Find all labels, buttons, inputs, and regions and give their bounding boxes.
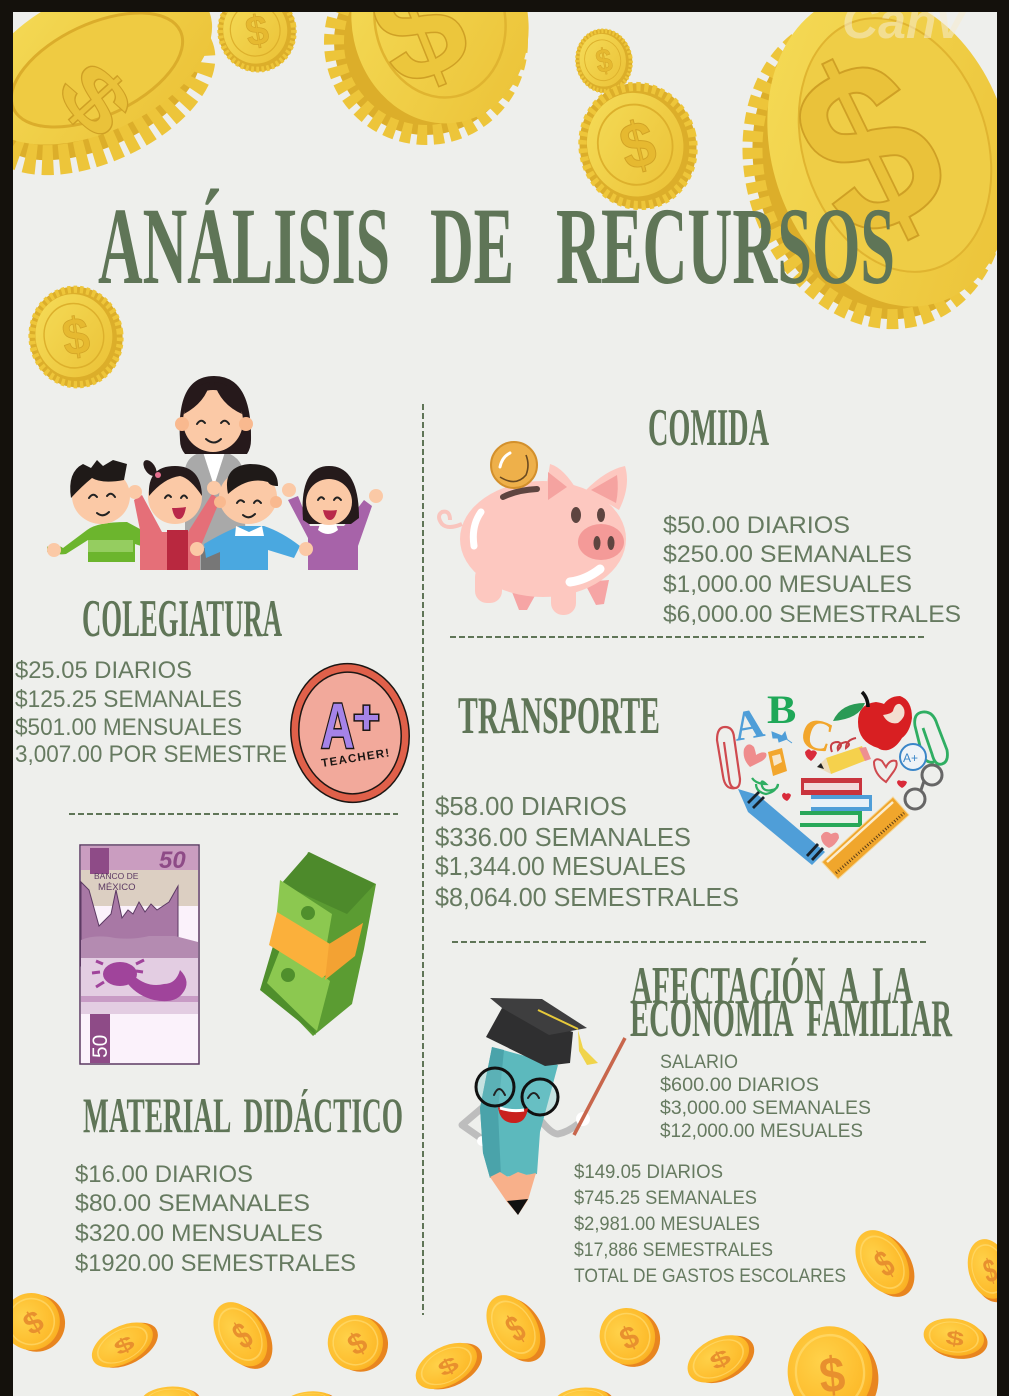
coin: medium (578, 82, 698, 210)
illustration: pencil teacher (462, 998, 625, 1215)
illustration: 50 peso banknote: BANCO DE (94, 871, 139, 881)
pencil tip (490, 1172, 536, 1215)
coin 4: $ (342, 1326, 373, 1363)
text: comida amounts: $50.00 DIARIOS (663, 512, 850, 539)
letters A B C: B (767, 689, 796, 733)
coin 4 (328, 1315, 388, 1372)
icon: piggy bank (439, 442, 627, 615)
heading: material didactico: MATERIAL DIDÁCTICO (83, 1087, 403, 1143)
text: total de gastos escolares: $745.25 SEMANALES (574, 1188, 757, 1209)
text: transporte amounts: $58.00 DIARIOS (435, 793, 627, 821)
text: transporte amounts (435, 793, 739, 912)
icon: school supplies heart: A+ (903, 751, 918, 765)
heading: transporte: TRANSPORTE (458, 687, 660, 745)
text: comida amounts (663, 512, 961, 628)
coin 1: $ (17, 1303, 50, 1342)
text: material didactico amounts: $320.00 MENSUALES (75, 1220, 323, 1247)
child: purple top (47, 466, 383, 570)
text: material didactico amounts: $80.00 SEMANALES (75, 1190, 310, 1217)
coin: medium: $ (613, 106, 663, 185)
coin: top centre (333, 0, 547, 140)
coin 2 (92, 1322, 158, 1368)
pushpin (772, 732, 792, 743)
coin 7: $ (615, 1319, 644, 1357)
books (801, 778, 862, 795)
text: comida amounts: $6,000.00 SEMESTRALES (663, 601, 961, 628)
coin 15 (558, 1388, 612, 1396)
pencil (826, 746, 867, 774)
icon: stack of money (260, 852, 376, 1036)
coin: small upper right of centre: $ (593, 41, 615, 80)
paperclips (717, 727, 740, 788)
divider: vertical centre (422, 404, 424, 1315)
mouth (498, 1107, 528, 1123)
coin 9 (788, 1326, 878, 1396)
coin: large right: $ (756, 1, 982, 295)
illustration: 50 peso banknote: MÉXICO (98, 882, 135, 893)
coin 7 (600, 1308, 660, 1367)
divider: under colegiatura (69, 813, 398, 815)
text: comida amounts: $1,000.00 MESUALES (663, 571, 912, 598)
text: salario: $12,000.00 MESUALES (660, 1120, 863, 1142)
child: green sweater (47, 460, 153, 562)
pointer (574, 1038, 625, 1135)
letters A B C (730, 689, 839, 763)
top gold coins (0, 0, 1009, 393)
text: salario: $3,000.00 SEMANALES (660, 1097, 871, 1119)
text: total de gastos escolares (574, 1162, 846, 1287)
text: colegiatura amounts: $25.05 DIARIOS (15, 657, 192, 684)
coin 6: $ (498, 1307, 533, 1350)
coin 12 (924, 1318, 988, 1359)
divider: under comida (450, 636, 924, 638)
coin 11 (968, 1239, 997, 1302)
coin 10: $ (867, 1242, 902, 1285)
coin 3 (213, 1302, 272, 1369)
illustration: teacher and children (47, 376, 383, 570)
child: blue shirt (204, 464, 300, 570)
letters A B C: C (795, 707, 839, 763)
ruler (822, 797, 909, 879)
title (98, 185, 895, 307)
sharpener and squiggles (768, 748, 787, 776)
coin: top left (13, 12, 216, 176)
badge: A+ teacher (282, 656, 418, 810)
text: material didactico amounts: $1920.00 SEMESTRALES (75, 1250, 356, 1277)
heading: comida: COMIDA (648, 399, 769, 457)
divider: under transporte (452, 941, 926, 943)
coin: top left: $ (40, 44, 152, 155)
text: total de gastos escolares: $17,886 SEMESTRALES (574, 1240, 773, 1261)
text: total de gastos escolares: TOTAL DE GASTOS ESCOLARES (574, 1266, 846, 1287)
child: pink jacket (134, 458, 220, 570)
coin 1 (13, 1293, 66, 1352)
coin 8: $ (706, 1344, 735, 1375)
badge: A+ teacher: TEACHER! (321, 747, 391, 770)
apple (858, 696, 912, 750)
title: DE (430, 185, 514, 307)
text: salario: SALARIO (660, 1051, 738, 1073)
text: salario: $600.00 DIARIOS (660, 1074, 819, 1096)
A+ badge and glasses (900, 744, 926, 770)
coin 6 (486, 1295, 546, 1362)
pencil arms (462, 1108, 578, 1139)
text: colegiatura amounts: 3,007.00 POR SEMESTRE (15, 741, 287, 768)
coin 8 (688, 1335, 754, 1384)
text: material didactico amounts: $16.00 DIARIOS (75, 1161, 253, 1188)
text: transporte amounts: $336.00 SEMANALES (435, 824, 691, 852)
crayon (738, 789, 825, 865)
graduation cap (486, 1008, 573, 1066)
pencil body (480, 1047, 558, 1178)
badge: A+ teacher: + (353, 691, 380, 743)
text: colegiatura amounts: $501.00 MENSUALES (15, 714, 242, 741)
text: total de gastos escolares: $149.05 DIARIOS (574, 1162, 723, 1183)
illustration: 50 peso banknote (80, 845, 199, 1064)
coin: small top: $ (242, 5, 272, 56)
coin: left below title: $ (59, 306, 93, 367)
hearts (744, 744, 766, 767)
coin 13 (144, 1386, 200, 1396)
letters A B C: A (730, 700, 768, 751)
text: colegiatura amounts: $125.25 SEMANALES (15, 686, 242, 713)
text: material didactico amounts (75, 1161, 356, 1277)
coin 3: $ (225, 1314, 260, 1357)
text: colegiatura amounts (15, 657, 287, 768)
illustration: 50 peso banknote: 50 (89, 1035, 112, 1058)
bottom orange coins (0, 1219, 1009, 1396)
badge: A+ teacher: A (321, 691, 354, 762)
coin: small top (217, 12, 297, 72)
text: salario (660, 1051, 871, 1142)
coin 2: $ (110, 1331, 138, 1360)
heading: afectacion a la economia familiar (630, 957, 952, 1048)
coin 10 (855, 1230, 914, 1297)
coin: small upper right of centre (575, 28, 633, 94)
text: comida amounts: $250.00 SEMANALES (663, 541, 912, 568)
glasses (476, 1068, 514, 1106)
teacher (175, 376, 253, 570)
coin 5: $ (434, 1352, 463, 1382)
illustration: 50 peso banknote: 50 (159, 847, 186, 874)
text: transporte amounts: $1,344.00 MESUALES (435, 853, 686, 881)
coin 14 (292, 1391, 332, 1396)
title: ANÁLISIS (98, 185, 390, 307)
text: transporte amounts: $8,064.00 SEMESTRALES (435, 884, 739, 912)
text: total de gastos escolares: $2,981.00 MESUALES (574, 1214, 760, 1235)
coin 11: $ (980, 1251, 1001, 1290)
coin 12: $ (944, 1326, 966, 1351)
coin: left below title (28, 286, 124, 388)
icon: school supplies heart (717, 689, 947, 879)
coin 5 (416, 1342, 482, 1390)
heading: colegiatura: COLEGIATURA (82, 590, 282, 648)
